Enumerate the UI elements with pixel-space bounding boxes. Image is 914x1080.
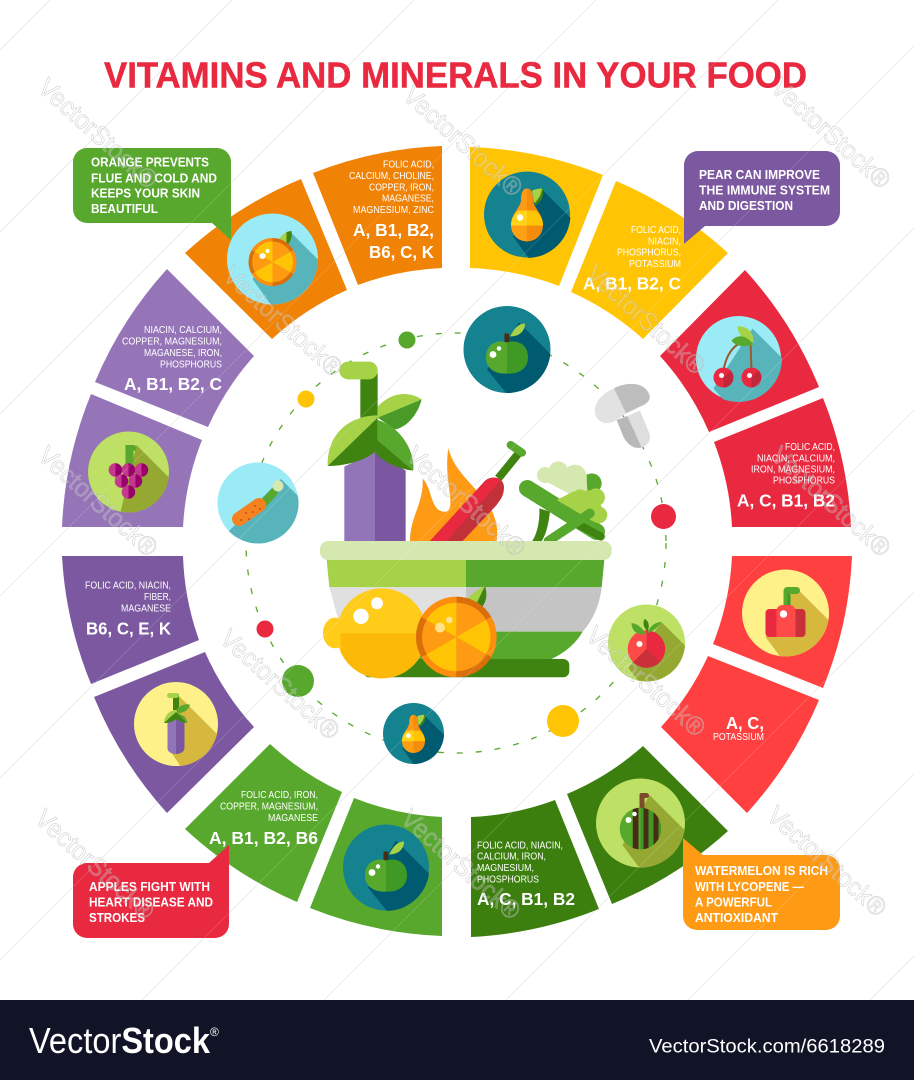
callout: watermelon fact: [683, 838, 840, 930]
icon: apple: [343, 824, 429, 911]
text: pear minerals: POTASSIUM: [629, 259, 681, 270]
callout: watermelon fact: ANTIOXIDANT: [695, 910, 778, 925]
callout: watermelon fact: A POWERFUL: [695, 894, 772, 909]
callout: apple fact: [73, 845, 229, 938]
callout: orange fact: ORANGE PREVENTS: [91, 155, 209, 170]
panel: red nutrient segment: [714, 398, 851, 527]
icon: orange: [227, 214, 318, 304]
watermark: VectorStock®: [580, 620, 712, 743]
callout: apple fact: STROKES: [89, 910, 145, 925]
text: grape minerals: PHOSPHORUS: [160, 359, 222, 370]
watermark: VectorStock®: [765, 440, 897, 563]
panel: purple grape icon segment: [62, 394, 202, 527]
text: watermelon minerals: [477, 840, 575, 909]
text: apple minerals: MAGANESE: [268, 813, 318, 824]
text: watermelon minerals: A, C, B1, B2: [477, 889, 575, 909]
text: grape minerals: NIACIN, CALCIUM,: [144, 325, 222, 336]
dashed orbit circle: [246, 333, 666, 753]
footer band: [0, 1000, 914, 1080]
text: grape minerals: [122, 325, 222, 394]
callout: orange fact: KEEPS YOUR SKIN: [91, 186, 200, 201]
lemon: [323, 588, 427, 678]
eggplant: [328, 362, 422, 541]
panel: green apple icon segment: [310, 798, 442, 936]
text: apple minerals: COPPER, MAGNESIUM,: [220, 802, 318, 813]
callout: orange fact: [73, 148, 231, 240]
panel: bright red nutrient segment: [661, 656, 819, 813]
panel: dark purple nutrient segment: [62, 556, 199, 684]
text: pear minerals: NIACIN,: [648, 236, 681, 247]
callout: watermelon fact: WITH LYCOPENE —: [695, 879, 804, 894]
text: orange minerals: MAGANESE,: [382, 194, 434, 205]
panel: red cherry icon segment: [660, 270, 819, 432]
text: orange minerals: CALCIUM, CHOLINE,: [349, 171, 434, 182]
text: pepper minerals: POTASSIUM: [713, 732, 764, 743]
text: watermelon minerals: FOLIC ACID, NIACIN,: [477, 840, 563, 851]
callout: watermelon fact: WATERMELON IS RICH: [695, 863, 828, 878]
text: pepper minerals: A, C,: [726, 713, 764, 733]
text: pear minerals: A, B1, B2, C: [583, 274, 681, 294]
panel: purple nutrient segment: [95, 269, 254, 427]
text: orange minerals: COPPER, IRON,: [369, 182, 434, 193]
text: pepper minerals: [713, 713, 764, 743]
icon: pear: [484, 172, 570, 258]
watermark: VectorStock®: [765, 72, 897, 195]
watermark: VectorStock®: [32, 440, 164, 563]
panel: orange nutrient segment: [313, 146, 442, 285]
text: orange minerals: [349, 160, 434, 262]
footer url: VectorStock.com/6618289: [649, 1037, 885, 1058]
text: watermelon minerals: CALCIUM, IRON,: [477, 852, 546, 863]
icon: orbit carrot: [218, 462, 298, 544]
callout: pear fact: THE IMMUNE SYSTEM: [699, 182, 830, 197]
icon: orbit pear: [383, 703, 444, 764]
icon: orbit apple: [464, 306, 550, 393]
panel: yellow nutrient segment: [571, 181, 728, 339]
chili pepper: [430, 445, 522, 541]
orbit dots: [256, 332, 676, 737]
panel: yellow pear icon segment: [470, 147, 603, 286]
text: cherry minerals: IRON, MAGNESIUM,: [751, 464, 835, 475]
text: eggplant minerals: [85, 581, 171, 638]
icon: grapes: [88, 432, 169, 512]
watermark: VectorStock®: [395, 803, 527, 926]
watermark: VectorStock®: [214, 623, 346, 746]
panel: dark purple eggplant icon segment: [94, 652, 259, 819]
orange: [416, 586, 497, 677]
watermark: [29, 72, 897, 926]
text: grape minerals: MAGANESE, IRON,: [144, 348, 222, 359]
text: orange minerals: MAGNESIUM, ZINC: [353, 205, 434, 216]
text: grape minerals: A, B1, B2, C: [124, 374, 222, 394]
callout: orange fact: BEAUTIFUL: [91, 201, 158, 216]
icon: orbit mushroom: [595, 384, 650, 448]
callout: pear fact: AND DIGESTION: [699, 198, 793, 213]
text: orange minerals: FOLIC ACID,: [383, 160, 434, 171]
text: eggplant minerals: B6, C, E, K: [86, 618, 171, 638]
text: cherry minerals: A, C, B1, B2: [737, 491, 835, 511]
text: apple minerals: A, B1, B2, B6: [209, 828, 318, 848]
panel: dark green watermelon icon segment: [567, 746, 728, 904]
text: eggplant minerals: MAGANESE: [121, 603, 171, 614]
watermark: VectorStock®: [400, 440, 532, 563]
title: VITAMINS AND MINERALS IN YOUR FOOD: [104, 55, 807, 96]
callout: apple fact: HEART DISEASE AND: [89, 895, 213, 910]
panel: orange icon segment: [185, 179, 347, 339]
text: watermelon minerals: PHOSPHORUS: [477, 874, 539, 885]
watermark: VectorStock®: [580, 258, 712, 381]
callout: orange fact: FLUE AND COLD AND: [91, 170, 217, 185]
flame: [410, 448, 497, 541]
text: eggplant minerals: FOLIC ACID, NIACIN,: [85, 581, 171, 592]
footer registered mark: ®: [210, 1025, 219, 1039]
text: orange minerals: B6, C, K: [369, 242, 434, 262]
footer logo: VectorStock: [29, 1020, 211, 1061]
watermark: VectorStock®: [29, 803, 161, 926]
icon: cherries: [696, 316, 782, 402]
bowl: [320, 541, 612, 677]
text: pear minerals: FOLIC ACID,: [631, 225, 681, 236]
text: apple minerals: FOLIC ACID, IRON,: [241, 790, 318, 801]
text: cherry minerals: PHOSPHORUS: [773, 475, 835, 486]
watermark: VectorStock®: [32, 72, 164, 195]
watermark: VectorStock®: [761, 800, 893, 923]
icon: eggplant: [134, 682, 218, 766]
callout: pear fact: PEAR CAN IMPROVE: [699, 167, 820, 182]
callout: pear fact: [684, 151, 840, 244]
text: apple minerals: [209, 790, 318, 848]
text: cherry minerals: [737, 442, 835, 511]
panel: green nutrient segment: [185, 744, 342, 902]
text: pear minerals: [583, 225, 681, 294]
watermark: VectorStock®: [397, 80, 529, 203]
illustration: salad bowl with vegetables: [320, 362, 612, 678]
text: cherry minerals: FOLIC ACID,: [785, 442, 835, 453]
icon: orbit tomato: [608, 604, 685, 682]
text: cherry minerals: NIACIN, CALCIUM,: [757, 453, 835, 464]
callout: apple fact: APPLES FIGHT WITH: [89, 879, 210, 894]
watermark: VectorStock®: [217, 260, 349, 383]
panel: bright red pepper icon segment: [713, 556, 852, 688]
text: orange minerals: A, B1, B2,: [353, 220, 434, 240]
text: pear minerals: PHOSPHORUS,: [617, 248, 681, 259]
broccoli: [527, 461, 607, 541]
text: grape minerals: COPPER, MAGNESIUM,: [122, 337, 222, 348]
text: watermelon minerals: MAGNESIUM,: [477, 863, 534, 874]
icon: watermelon: [596, 778, 685, 868]
panel: dark green nutrient segment: [471, 800, 599, 937]
icon: bell pepper: [742, 570, 829, 656]
text: eggplant minerals: FIBER,: [144, 592, 171, 603]
